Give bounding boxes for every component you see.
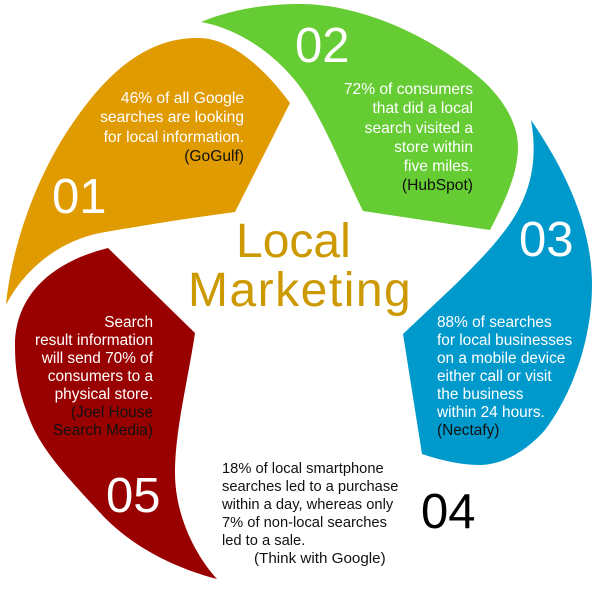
text: 02 statistic: 72% of consumers <box>344 81 473 98</box>
text: 01 statistic: searches are looking <box>100 109 244 126</box>
block 04: text without panel <box>221 461 476 567</box>
panel 02: green segment <box>201 4 518 230</box>
number 01: 01 <box>52 170 107 224</box>
text: 05 statistic: (Joel House <box>71 404 153 421</box>
text: 03 statistic: 88% of searches <box>437 314 552 331</box>
text: 05 statistic: result information <box>35 332 153 349</box>
text: 04 statistic: searches led to a purchase <box>222 479 398 495</box>
text: 05 statistic: Search <box>104 314 153 331</box>
title: Marketing <box>188 264 412 317</box>
text: 05 statistic: Search Media) <box>53 422 153 439</box>
text: 02 statistic: (HubSpot) <box>402 177 473 194</box>
title: Local <box>236 215 351 268</box>
text: 03 statistic: either call or visit <box>437 368 552 385</box>
text: 04 statistic: 18% of local smartphone <box>222 461 384 477</box>
text: 04 statistic: 7% of non-local searches <box>222 515 387 531</box>
text: 01 statistic: (GoGulf) <box>184 148 244 165</box>
text: 05 statistic: consumers to a <box>48 368 153 385</box>
text: 03 statistic: the business <box>437 386 524 403</box>
text: 02 statistic: that did a local <box>372 100 473 117</box>
panel 05: red segment <box>15 248 217 579</box>
text: 02 statistic: store within <box>394 139 473 156</box>
panel 03: blue segment <box>403 120 592 465</box>
text: 02 statistic: search visited a <box>365 120 473 137</box>
text: 04 statistic: within a day, whereas only <box>221 497 394 513</box>
number 05: 05 <box>106 469 161 523</box>
number 03: 03 <box>519 213 574 267</box>
text: 03 statistic: for local businesses <box>437 332 572 349</box>
text: 04 statistic: led to a sale. <box>222 533 305 549</box>
text: 02 statistic: five miles. <box>404 158 473 175</box>
text: 04 statistic: (Think with Google) <box>254 550 386 567</box>
number 04: 04 <box>421 485 476 539</box>
text: 05 statistic: will send 70% of <box>41 350 154 367</box>
number 02: 02 <box>295 19 350 73</box>
text: 01 statistic: for local information. <box>104 129 244 146</box>
panel 01: orange segment <box>6 38 290 305</box>
text: 05 statistic: physical store. <box>55 386 153 403</box>
text: 03 statistic: on a mobile device <box>437 350 565 367</box>
text: 03 statistic: (Nectafy) <box>437 422 499 439</box>
text: 03 statistic: within 24 hours. <box>436 404 545 421</box>
text: 01 statistic: 46% of all Google <box>121 90 244 107</box>
